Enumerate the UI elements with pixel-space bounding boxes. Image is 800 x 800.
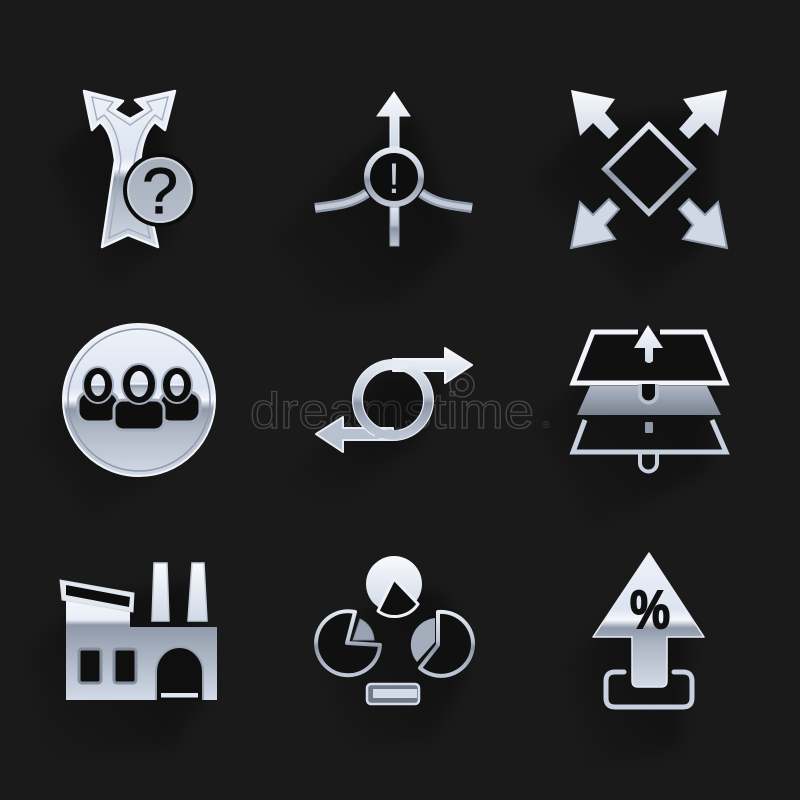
dash (645, 422, 653, 433)
building (66, 600, 217, 700)
windows (79, 649, 101, 683)
door strip (161, 693, 198, 698)
top pie (366, 556, 422, 617)
middle layer (577, 386, 721, 415)
watermark: dreamstime (250, 383, 534, 439)
diamond (605, 125, 693, 213)
icon: looping double arrow (280, 348, 472, 500)
legend bar (367, 684, 419, 704)
icon: factory (30, 563, 217, 760)
centre person (114, 364, 164, 430)
icon: three way junction with warning (270, 92, 472, 310)
top layer (573, 332, 726, 383)
arrow (593, 553, 704, 687)
chimneys (152, 563, 169, 621)
icon: stacked layers with up arrow (540, 325, 726, 530)
right person (160, 367, 200, 422)
icon: team badge (30, 324, 215, 520)
bottom layer (573, 420, 726, 472)
icon: three pie charts (316, 556, 473, 750)
exclamation mark: ! (388, 155, 400, 203)
percent sign: % (630, 580, 670, 640)
icon: percent up arrow (570, 553, 704, 770)
left pie (316, 611, 380, 675)
watermark: ® (542, 420, 550, 431)
left person (78, 367, 118, 422)
question mark: ? (142, 155, 178, 227)
up arrow (634, 325, 663, 363)
roof (60, 580, 134, 612)
tray (606, 672, 692, 707)
icon: forked arrow with question mark (50, 91, 197, 290)
icon: four arrows around diamond (530, 90, 727, 300)
right pie (411, 612, 473, 676)
